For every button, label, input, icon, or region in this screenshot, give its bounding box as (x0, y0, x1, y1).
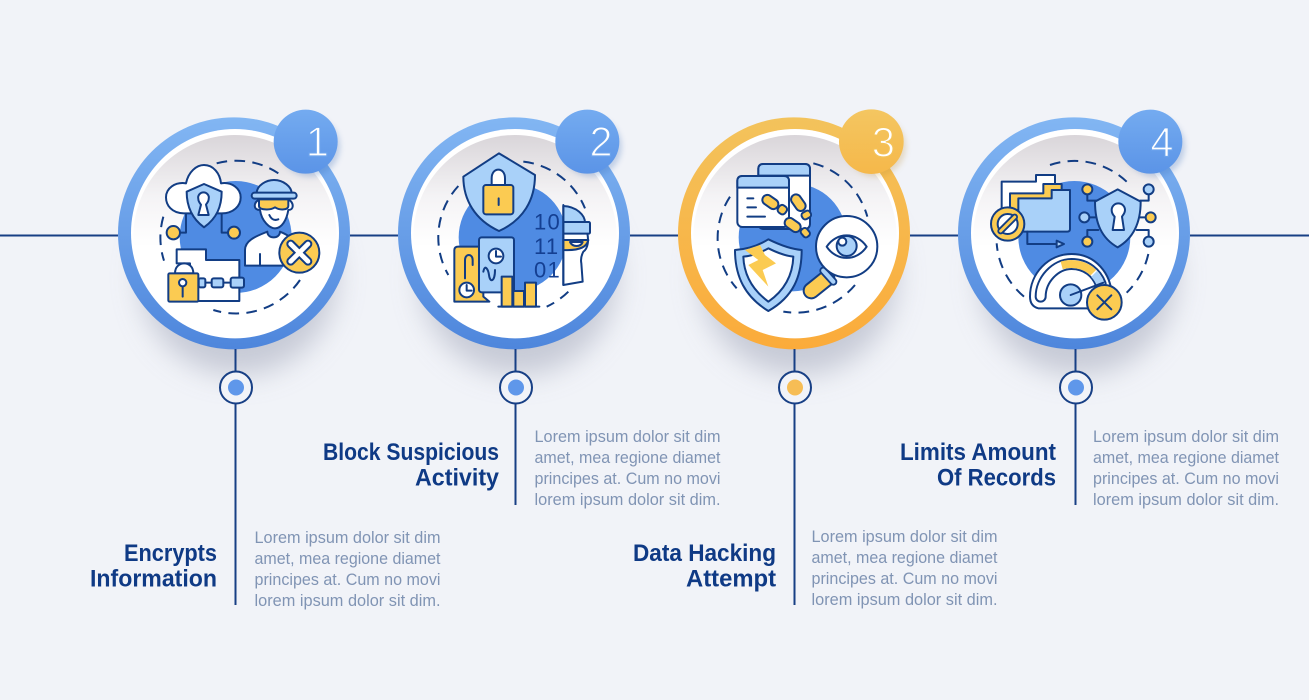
step 1 connector (220, 349, 252, 605)
text block: step 1: amet, mea regione diamet (254, 550, 441, 568)
panel: step 4 medallion: 4 (1150, 120, 1173, 166)
text block: step 2: Lorem ipsum dolor sit dim (534, 428, 720, 446)
heading: Encrypts Information: Encrypts (124, 540, 217, 567)
icon: binary digits: 10 (534, 209, 561, 234)
heading: Limits Amount Of Records: Of Records (937, 464, 1056, 492)
heading: Encrypts Information: Information (90, 566, 217, 592)
text block: step 2: lorem ipsum dolor sit dim. (534, 491, 720, 509)
panel: step 1 medallion (118, 110, 350, 375)
icon: browser windows with footprints (737, 164, 812, 239)
text block: step 1: lorem ipsum dolor sit dim. (254, 592, 440, 610)
icon: locked folder (168, 249, 244, 302)
icon: hacker with cross (245, 180, 319, 273)
icon: shield with circuit nodes (1079, 184, 1156, 247)
heading: Block Suspicious Activity: Activity (415, 464, 500, 492)
heading: Data Hacking Attempt (633, 540, 776, 592)
text block: step 4: Lorem ipsum dolor sit dim (1093, 428, 1279, 446)
panel: step 3 medallion: 3 (872, 120, 895, 166)
text block: step 3: Lorem ipsum dolor sit dim (812, 528, 998, 546)
text block: step 3: principes at. Cum no movi (812, 570, 998, 588)
heading: Limits Amount Of Records: Limits Amount (900, 439, 1056, 466)
text block: step 2: amet, mea regione diamet (534, 449, 721, 467)
panel: step 3 medallion (678, 109, 910, 375)
step 3 connector (779, 349, 811, 605)
icon: magnifier with eye (811, 216, 877, 291)
icon: cloud with shield (166, 165, 241, 239)
panel: step 2 medallion: 2 (589, 119, 612, 165)
heading: Data Hacking Attempt: Attempt (686, 566, 776, 592)
text block: step 3 (812, 528, 998, 609)
text block: step 2: principes at. Cum no movi (534, 470, 720, 488)
heading: Encrypts Information (90, 540, 217, 592)
icon: documents and bar chart (454, 237, 539, 307)
text block: step 4: lorem ipsum dolor sit dim. (1093, 491, 1279, 509)
text block: step 3: amet, mea regione diamet (812, 549, 998, 567)
step 2 connector (500, 349, 532, 505)
step 4 connector (1060, 349, 1092, 505)
icon: masked thief (563, 205, 590, 285)
panel: step 4 medallion (958, 110, 1190, 375)
text block: step 1: principes at. Cum no movi (254, 571, 440, 589)
icon: shield with lightning (735, 239, 802, 311)
horizontal timeline (0, 234, 1309, 236)
icon: binary digits: 11 (534, 234, 559, 259)
icon: speed gauge with cross (1030, 254, 1122, 320)
heading: Block Suspicious Activity (323, 439, 500, 492)
text block: step 4 (1093, 428, 1279, 509)
icon: shield with padlock (463, 153, 535, 231)
text block: step 2 (534, 428, 721, 509)
icon: binary digits (534, 209, 561, 282)
text block: step 3: lorem ipsum dolor sit dim. (812, 591, 998, 609)
icon: blocked folders (991, 175, 1070, 247)
heading: Block Suspicious Activity: Block Suspicious (323, 439, 499, 466)
text block: step 4: principes at. Cum no movi (1093, 470, 1279, 488)
text block: step 4: amet, mea regione diamet (1093, 449, 1279, 467)
text block: step 1 (254, 529, 441, 610)
panel: step 2 medallion (398, 110, 630, 375)
heading: Limits Amount Of Records (900, 439, 1056, 492)
heading: Data Hacking Attempt: Data Hacking (633, 540, 776, 567)
text block: step 1: Lorem ipsum dolor sit dim (254, 529, 440, 547)
icon: binary digits: 01 (534, 257, 561, 282)
panel: step 1 medallion: 1 (306, 119, 329, 165)
